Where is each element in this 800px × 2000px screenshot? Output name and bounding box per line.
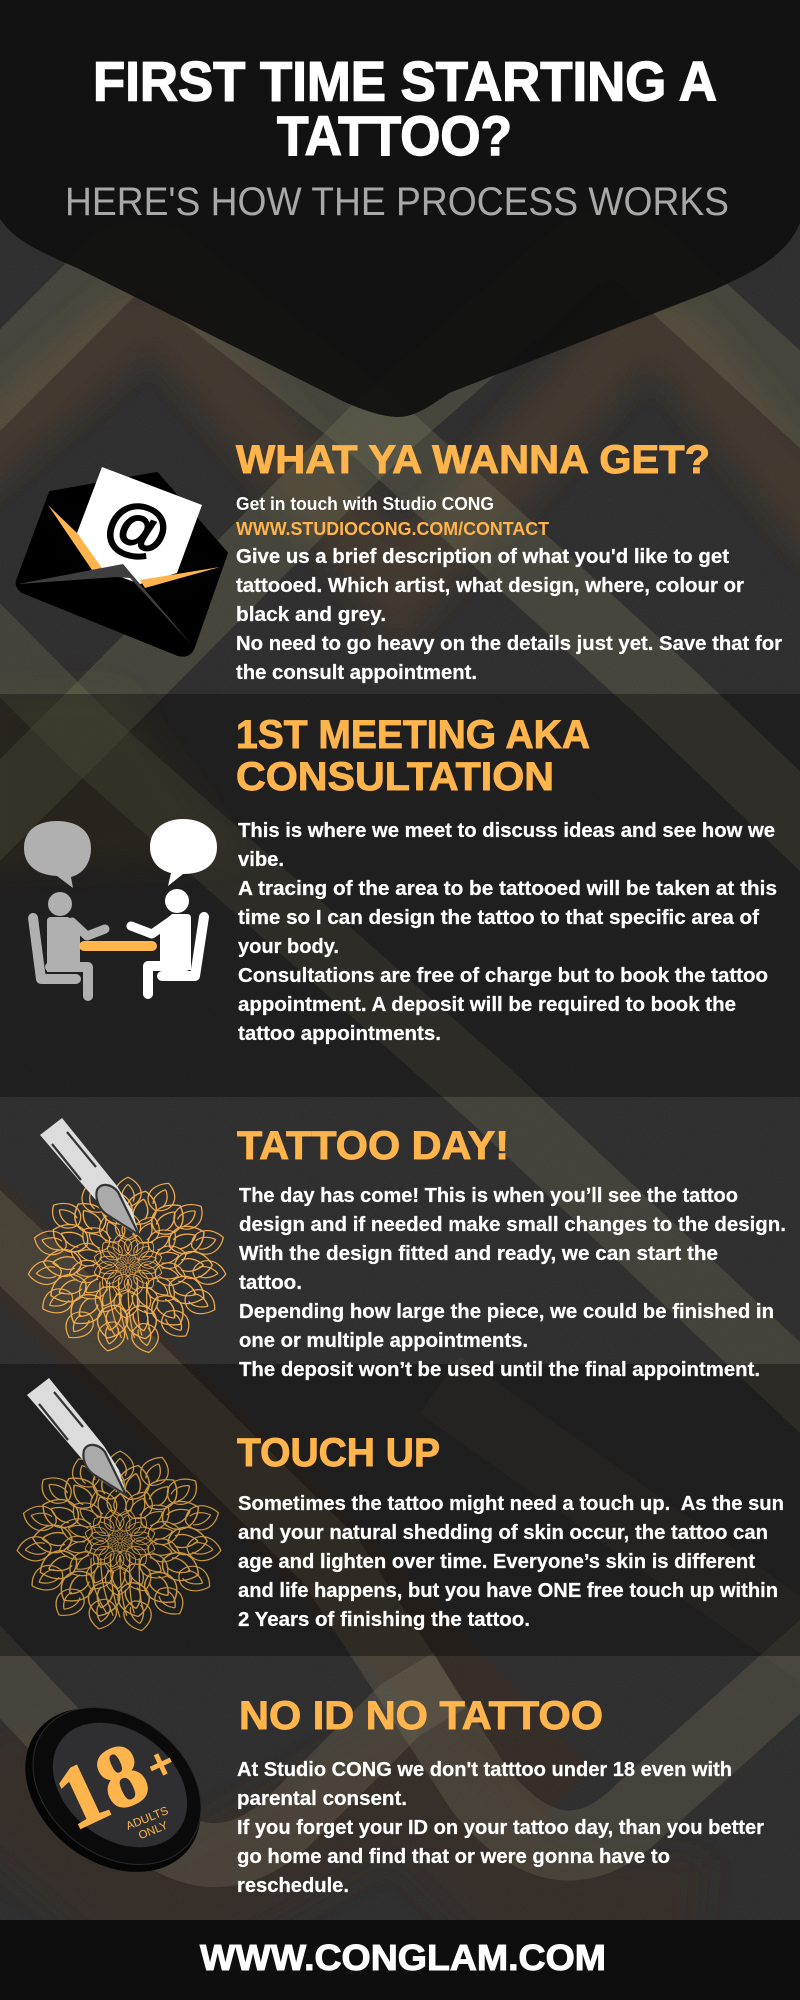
text block: your body. <box>238 935 339 958</box>
heading: TOUCH UP <box>237 1431 440 1475</box>
text block: A tracing of the area to be tattooed will be taken at this <box>238 877 777 900</box>
text block: vibe. <box>238 848 284 871</box>
text block: appointment. A deposit will be required to book the <box>238 993 736 1016</box>
text block: one or multiple appointments. <box>239 1329 528 1352</box>
title <box>93 50 717 167</box>
text block: Consultations are free of charge but to book the tattoo <box>238 964 768 987</box>
icon: envelope with at sign <box>17 467 227 656</box>
text block: Get in touch with Studio CONG <box>236 494 494 514</box>
text block <box>237 1758 764 1897</box>
icon: 18+ badge: ADULTS <box>124 1805 171 1833</box>
text block: Give us a brief description of what you'd like to get <box>236 545 729 568</box>
heading: 1ST MEETING AKA <box>236 713 590 757</box>
heading: CONSULTATION <box>236 755 554 799</box>
text block: Depending how large the piece, we could be finished in <box>239 1300 774 1323</box>
text block: If you forget your ID on your tattoo day, than you better <box>237 1816 764 1839</box>
text block: WWW.STUDIOCONG.COM/CONTACT <box>236 519 549 539</box>
panel: touch up <box>16 1378 784 1633</box>
text block: This is where we meet to discuss ideas and see how we <box>238 819 775 842</box>
title: TATTOO? <box>277 104 512 167</box>
text block: and life happens, but you have ONE free touch up within <box>238 1579 778 1602</box>
text block: age and lighten over time. Everyone’s skin is different <box>238 1550 755 1573</box>
icon: two people talking at table <box>24 819 217 996</box>
text block: and your natural shedding of skin occur, the tattoo can <box>238 1521 768 1544</box>
text block <box>236 494 782 684</box>
text block: design and if needed make small changes to the design. <box>239 1213 786 1236</box>
panel: no id no tattoo <box>0 1674 764 1906</box>
title: FIRST TIME STARTING A <box>93 50 717 112</box>
icon: darker flower with tattoo needle <box>16 1378 223 1633</box>
icon: flower with tattoo needle <box>27 1118 227 1355</box>
header shape <box>0 0 800 417</box>
footer: WWW.CONGLAM.COM <box>200 1937 606 1978</box>
heading <box>236 713 590 799</box>
text block <box>238 1492 784 1631</box>
heading: TATTOO DAY! <box>237 1124 509 1168</box>
text block: reschedule. <box>237 1874 349 1897</box>
subtitle: HERE'S HOW THE PROCESS WORKS <box>65 180 729 224</box>
icon: 18+ badge: 18 <box>42 1724 163 1849</box>
text block: tattoo appointments. <box>238 1022 441 1045</box>
text block: tattoo. <box>239 1271 302 1294</box>
heading: WHAT YA WANNA GET? <box>236 438 710 482</box>
text block: With the design fitted and ready, we can start the <box>239 1242 718 1265</box>
text block: The deposit won’t be used until the final appointment. <box>239 1358 760 1381</box>
icon: 18+ badge <box>0 1674 233 1906</box>
text block: the consult appointment. <box>236 661 477 684</box>
panel: consultation <box>24 713 777 1045</box>
heading: NO ID NO TATTOO <box>239 1694 603 1738</box>
text block <box>239 1184 786 1381</box>
text block <box>238 819 777 1045</box>
text block: Sometimes the tattoo might need a touch up. As the sun <box>238 1492 784 1515</box>
text block: At Studio CONG we don't tatttoo under 18 even with <box>237 1758 732 1781</box>
footer <box>0 1920 800 2000</box>
text block: parental consent. <box>237 1787 407 1810</box>
panel: tattoo day <box>27 1118 786 1381</box>
section shading bands <box>0 694 800 1656</box>
text block: black and grey. <box>236 603 386 626</box>
icon: 18+ badge: ONLY <box>137 1820 170 1842</box>
icon: envelope with at sign: @ <box>96 483 180 572</box>
text block: tattooed. Which artist, what design, where, colour or <box>236 574 744 597</box>
text block: No need to go heavy on the details just yet. Save that for <box>236 632 782 655</box>
text block: time so I can design the tattoo to that specific area of <box>238 906 759 929</box>
text block: go home and find that or were gonna have to <box>237 1845 670 1868</box>
panel: what ya wanna get <box>17 438 782 684</box>
icon: 18+ badge: + <box>139 1737 183 1792</box>
text block: The day has come! This is when you’ll see the tattoo <box>239 1184 738 1207</box>
text block: 2 Years of finishing the tattoo. <box>238 1608 530 1631</box>
